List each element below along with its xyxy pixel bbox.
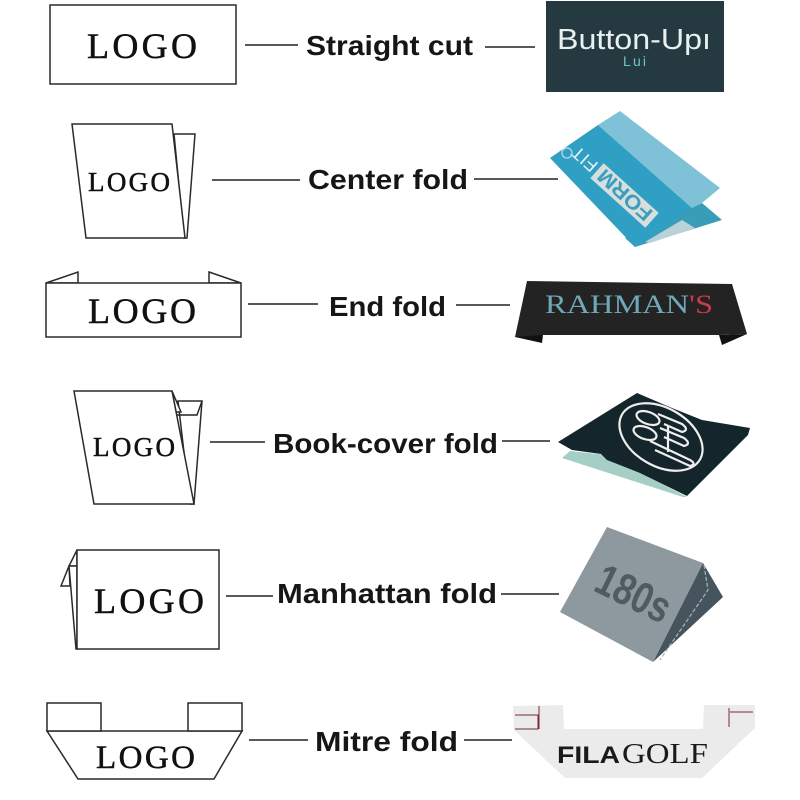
- heading: center fold: Center fold: [308, 164, 468, 195]
- connector: book-cover fold left: [210, 441, 265, 443]
- photo: Fila Golf white label: FILA: [557, 742, 620, 769]
- diagram: mitre fold label: [47, 703, 242, 779]
- diagram: center fold label: [72, 124, 195, 238]
- connector: end fold left: [248, 303, 318, 305]
- diagram: end fold label: [46, 272, 241, 337]
- diagram: manhattan fold label: [61, 550, 219, 649]
- photo: 180s grey label: 180s: [588, 555, 679, 633]
- connector: mitre fold right: [464, 739, 512, 741]
- connector: center fold left: [212, 179, 300, 181]
- photo: Button-Upi woven label: [546, 1, 724, 92]
- diagram: straight cut label: LOGO: [87, 26, 197, 66]
- row: straight cut: [50, 1, 724, 92]
- photo: Fila Golf white label: [513, 705, 755, 778]
- diagram: straight cut label: [50, 5, 236, 84]
- connector: straight cut right: [485, 46, 535, 48]
- heading: straight cut: Straight cut: [306, 30, 473, 61]
- diagram: book-cover fold label: [74, 391, 202, 504]
- diagram: manhattan fold label: LOGO: [94, 581, 204, 621]
- connector: manhattan fold right: [501, 593, 559, 595]
- row: mitre fold: [47, 703, 755, 779]
- connector: book-cover fold right: [502, 440, 550, 442]
- connector: mitre fold left: [249, 739, 308, 741]
- photo: Rahman's black label: [515, 281, 747, 345]
- heading: manhattan fold: Manhattan fold: [277, 578, 497, 609]
- diagram: mitre fold label: LOGO: [96, 740, 195, 776]
- row: end fold: [46, 272, 747, 345]
- photo: black label with round logo: [558, 389, 750, 497]
- photo: Form Fit blue label: FIT: [568, 142, 602, 176]
- diagram: end fold label: LOGO: [88, 291, 196, 331]
- photo: Form Fit blue label: FORM: [594, 164, 657, 225]
- photo: Form Fit blue label: [550, 111, 722, 247]
- connector: manhattan fold left: [226, 595, 273, 597]
- row: center fold: [72, 111, 722, 247]
- photo: Button-Upi woven label: Button-Upı: [557, 24, 711, 56]
- heading: end fold: End fold: [329, 291, 446, 322]
- row: manhattan fold: [61, 527, 723, 662]
- heading: book-cover fold: Book-cover fold: [273, 428, 498, 459]
- row: book-cover fold: [74, 389, 750, 504]
- heading: mitre fold: Mitre fold: [315, 726, 458, 757]
- connector: center fold right: [474, 178, 558, 180]
- diagram: center fold label: LOGO: [88, 167, 170, 197]
- photo: 180s grey label: [560, 527, 723, 662]
- photo: Button-Upi woven label: Lui: [623, 53, 646, 69]
- photo: Rahman's black label: RAHMAN 'S: [545, 290, 713, 319]
- diagram: book-cover fold label: LOGO: [93, 432, 175, 462]
- photo: Fila Golf white label: GOLF: [622, 739, 708, 770]
- connector: straight cut left: [245, 44, 298, 46]
- connector: end fold right: [456, 304, 510, 306]
